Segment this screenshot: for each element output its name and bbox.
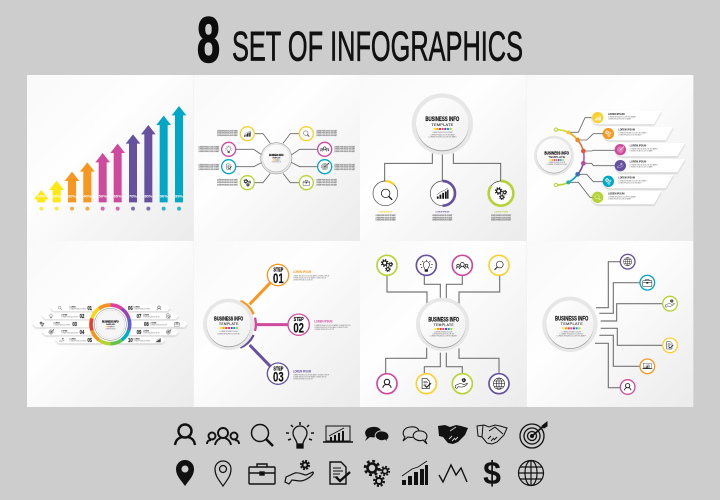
arrow chart: 10%	[37, 193, 46, 198]
step 01: 01	[273, 271, 284, 286]
text blocks: LOREM IPSUM DOLOR SIT AMET	[217, 179, 238, 182]
hub	[203, 299, 254, 350]
cards: LOREM IPSUM	[618, 130, 635, 132]
step 03: LOREM IPSUM DOLOR SIT AMET CONSECTETUR	[293, 374, 329, 377]
step numbers: 05	[87, 338, 92, 344]
cards: LOREM IPSUM	[618, 177, 635, 179]
title: 8	[197, 4, 220, 76]
cards: LOREM IPSUM DOLOR SIT AMET	[608, 195, 637, 198]
text blocks: LOREM IPSUM DOLOR SIT AMET	[316, 179, 338, 182]
arrow chart: 50%	[99, 193, 107, 198]
node captions: LOREM IPSUM	[494, 212, 508, 214]
ring centre: LOREM IPSUM	[105, 329, 116, 331]
text blocks: LOREM IPSUM DOLOR SIT AMET	[316, 181, 338, 184]
pink branch	[255, 318, 290, 331]
text blocks: LOREM IPSUM DOLOR SIT AMET	[334, 148, 356, 151]
step 03: LOREM IPSUM DOLOR SIT	[293, 379, 314, 381]
step captions: LOREM	[70, 306, 76, 308]
cards: LOREM IPSUM	[608, 114, 624, 116]
step numbers	[72, 306, 149, 344]
hub: BUSINESS INFO	[428, 318, 459, 324]
text blocks: LOREM IPSUM DOLOR SIT AMET	[199, 166, 220, 169]
icon row 2: $	[483, 455, 501, 491]
node: chart	[430, 181, 455, 206]
panel: rising arrows	[27, 75, 194, 241]
text blocks: LOREM IPSUM DOLOR SIT AMET	[316, 129, 338, 132]
hub: LOREM IPSUM DOLOR SIT	[432, 334, 454, 336]
text blocks: LOREM IPSUM DOLOR SIT AMET	[334, 168, 356, 171]
hub: TEMPLATE	[548, 155, 565, 159]
step 02	[288, 314, 351, 336]
step captions: LOREM IPSUM DOLOR SIT	[70, 340, 87, 342]
arrow chart: 90%	[160, 193, 168, 198]
cards: LOREM IPSUM DOLOR SIT AMET	[608, 118, 632, 121]
ring centre	[94, 308, 126, 340]
hub: LOREM IPSUM DOLOR SIT	[560, 333, 583, 335]
hub	[542, 297, 598, 352]
icon row 2	[176, 455, 544, 491]
text blocks	[199, 129, 356, 186]
text blocks: LOREM IPSUM DOLOR SIT AMET	[334, 150, 356, 153]
arrow chart	[34, 106, 186, 202]
arrow chart: 99%	[175, 193, 183, 198]
cards: LOREM IPSUM DOLOR SIT AMET	[630, 166, 654, 169]
connectors	[385, 153, 501, 181]
step captions: LOREM IPSUM DOLOR SIT	[134, 340, 151, 342]
node: search	[373, 181, 398, 206]
text blocks: LOREM IPSUM DOLOR SIT AMET	[217, 134, 238, 137]
hub: LOREM IPSUM DOLOR SIT AMET	[557, 334, 586, 337]
text blocks: LOREM IPSUM DOLOR SIT AMET	[199, 168, 220, 171]
step 02: LOREM IPSUM DOLOR SIT	[314, 329, 335, 331]
title	[197, 4, 523, 76]
hub: TEMPLATE	[219, 322, 239, 326]
hub	[534, 136, 574, 176]
step numbers: 02	[80, 314, 84, 320]
hub: LOREM IPSUM DOLOR SIT	[217, 333, 240, 335]
arrow chart: 70%	[129, 193, 137, 198]
step 02: STEP	[294, 317, 304, 323]
step 01: LOREM IPSUM DOLOR SIT AMET CONSECTETUR	[293, 274, 329, 277]
hub: TEMPLATE	[272, 156, 281, 159]
step numbers: 08	[144, 322, 149, 328]
orange branch	[240, 283, 270, 314]
ring centre: BUSINESS INFO	[102, 319, 119, 323]
connectors	[236, 134, 317, 183]
hub: LOREM IPSUM DOLOR SIT AMET	[429, 135, 457, 138]
hub	[412, 93, 473, 155]
hub: LOREM IPSUM DOLOR SIT AMET	[430, 335, 457, 338]
panel: arc with six cards	[527, 75, 693, 241]
icon nodes	[222, 127, 332, 190]
node captions: LOREM IPSUM DOLOR SIT AMET	[376, 216, 396, 219]
marker dots	[39, 207, 181, 211]
text blocks: LOREM IPSUM DOLOR SIT AMET	[199, 163, 220, 166]
ribbon icons	[40, 306, 180, 342]
step numbers: 03	[72, 322, 77, 328]
connectors	[568, 118, 615, 197]
hub: LOREM IPSUM DOLOR	[434, 332, 453, 334]
hub: BUSINESS INFO	[544, 150, 569, 155]
cards: LOREM IPSUM	[630, 146, 646, 148]
text blocks: LOREM IPSUM DOLOR SIT AMET	[334, 163, 356, 166]
hub: TEMPLATE	[431, 122, 454, 127]
cards	[592, 111, 685, 204]
hub: BUSINESS INFO	[555, 315, 588, 322]
step captions: LOREM	[143, 314, 150, 316]
step captions: LOREM IPSUM DOLOR SIT	[150, 324, 168, 326]
text blocks: LOREM IPSUM DOLOR SIT AMET	[316, 183, 338, 186]
purple branch	[240, 335, 270, 366]
bottom icon nodes	[377, 374, 509, 394]
node captions: LOREM IPSUM DOLOR SIT AMET	[432, 214, 453, 217]
rainbow ring	[83, 297, 137, 351]
icon row 1	[175, 422, 547, 448]
arrow chart: 40%	[83, 193, 92, 198]
top icon nodes	[377, 255, 509, 275]
step 02: LOREM IPSUM	[314, 320, 332, 324]
hub: LOREM IPSUM DOLOR SIT AMET	[430, 133, 455, 136]
arrow chart: 20%	[53, 193, 61, 198]
step 01	[267, 264, 329, 286]
node captions: LOREM IPSUM DOLOR SIT AMET	[432, 216, 453, 219]
arrow chart: 30%	[68, 193, 76, 198]
cards: LOREM IPSUM DOLOR SIT AMET	[618, 132, 647, 135]
step numbers: 10	[128, 338, 133, 344]
cards: LOREM IPSUM DOLOR SIT AMET	[618, 134, 642, 137]
panel: eight icon tree	[360, 241, 527, 407]
icon nodes	[620, 254, 677, 394]
cards: LOREM IPSUM DOLOR SIT AMET	[630, 150, 654, 153]
title: SET OF INFOGRAPHICS	[232, 22, 523, 70]
hub: LOREM IPSUM DOLOR SIT AMET	[432, 131, 453, 134]
cards: LOREM IPSUM DOLOR SIT AMET	[608, 197, 632, 200]
panel: three steps	[194, 241, 360, 407]
hub: LOREM IPSUM DOLOR	[562, 331, 582, 333]
left and right ribbons	[33, 305, 188, 343]
step 03: LOREM IPSUM	[293, 369, 311, 373]
step 01: LOREM IPSUM DOLOR SIT AMET CONSECTETUR	[293, 276, 327, 279]
step captions: LOREM	[134, 306, 140, 308]
node captions: LOREM IPSUM DOLOR SIT AMET	[376, 214, 396, 217]
node captions: LOREM IPSUM DOLOR SIT AMET	[491, 216, 512, 219]
panel: six icon bracket tree	[527, 241, 693, 407]
step captions: LOREM	[150, 322, 157, 324]
hub: TEMPLATE	[561, 322, 583, 326]
cards: LOREM IPSUM DOLOR SIT AMET	[618, 181, 642, 184]
panel: eight-node hub	[194, 75, 360, 241]
cards: LOREM IPSUM	[630, 162, 646, 164]
hub	[416, 298, 469, 351]
panel: ten-step ring	[27, 241, 194, 407]
node captions	[376, 212, 512, 222]
hub: LOREM IPSUM DOLOR	[272, 162, 281, 164]
step captions: LOREM	[134, 338, 140, 340]
step 03: LOREM IPSUM DOLOR SIT AMET CONSECTETUR	[293, 376, 327, 379]
node captions: LOREM IPSUM DOLOR SIT AMET	[491, 219, 512, 222]
text blocks: LOREM IPSUM DOLOR SIT AMET	[334, 145, 356, 148]
hub	[261, 143, 292, 174]
step numbers: 01	[87, 306, 92, 312]
step captions: LOREM IPSUM DOLOR SIT	[61, 316, 79, 318]
text blocks: LOREM IPSUM DOLOR SIT AMET	[199, 145, 220, 148]
node captions: LOREM IPSUM	[378, 212, 393, 214]
step captions: LOREM	[61, 314, 68, 316]
hub: BUSINESS INFO	[269, 153, 284, 157]
arrow chart: 60%	[114, 193, 122, 198]
cards: LOREM IPSUM DOLOR SIT AMET	[630, 164, 659, 167]
step captions: LOREM IPSUM DOLOR SIT	[134, 308, 151, 310]
step captions: LOREM IPSUM DOLOR SIT	[143, 332, 160, 334]
step 01: LOREM IPSUM	[293, 270, 311, 274]
cards: LOREM IPSUM	[608, 193, 624, 195]
panel: three-branch tree	[360, 75, 527, 241]
step captions: LOREM IPSUM DOLOR SIT	[143, 316, 160, 318]
arrow chart: 80%	[144, 193, 153, 198]
rainbow arc	[554, 128, 586, 187]
step numbers: 06	[128, 306, 133, 312]
hub: BUSINESS INFO	[214, 317, 244, 323]
hub: LOREM IPSUM DOLOR	[548, 162, 566, 164]
step captions: LOREM	[143, 330, 150, 332]
ring centre: TEMPLATE	[106, 323, 116, 326]
step captions: LOREM IPSUM DOLOR SIT	[61, 332, 79, 334]
step captions: LOREM IPSUM DOLOR SIT	[54, 324, 71, 326]
text blocks: LOREM IPSUM DOLOR SIT AMET	[199, 148, 220, 151]
step numbers: 07	[137, 314, 141, 320]
node captions: LOREM IPSUM DOLOR SIT AMET	[376, 219, 396, 222]
hub: LOREM IPSUM DOLOR	[220, 331, 238, 333]
node captions: LOREM IPSUM DOLOR SIT AMET	[491, 214, 512, 217]
hub: BUSINESS INFO	[425, 116, 459, 123]
text blocks: LOREM IPSUM DOLOR SIT AMET	[217, 129, 238, 132]
step captions	[54, 306, 168, 342]
step 01: LOREM IPSUM DOLOR SIT	[293, 279, 314, 281]
step 03: STEP	[273, 366, 284, 372]
step 02: 02	[293, 321, 304, 336]
hub: LOREM IPSUM DOLOR	[547, 164, 568, 166]
text blocks: LOREM IPSUM DOLOR SIT AMET	[334, 166, 356, 169]
text blocks: LOREM IPSUM DOLOR SIT AMET	[217, 132, 238, 135]
node captions: LOREM IPSUM DOLOR SIT AMET	[432, 219, 453, 222]
step 03	[267, 363, 329, 385]
cards: LOREM IPSUM DOLOR SIT AMET	[608, 116, 637, 119]
step 03: 03	[273, 370, 284, 385]
step captions: LOREM	[70, 338, 76, 340]
step 02: LOREM IPSUM DOLOR SIT AMET CONSECTETUR	[314, 326, 348, 329]
text blocks: LOREM IPSUM DOLOR SIT AMET	[316, 132, 338, 135]
cards: LOREM IPSUM DOLOR SIT AMET	[630, 148, 659, 151]
step 02: LOREM IPSUM DOLOR SIT AMET CONSECTETUR	[314, 324, 351, 327]
text blocks: LOREM IPSUM DOLOR SIT AMET	[217, 183, 238, 186]
step captions: LOREM	[61, 330, 68, 332]
connectors	[386, 276, 500, 373]
cards: LOREM IPSUM DOLOR SIT AMET	[618, 179, 647, 182]
step numbers: 04	[80, 330, 85, 336]
text blocks: LOREM IPSUM DOLOR SIT AMET	[316, 134, 338, 137]
hub: TEMPLATE	[434, 323, 454, 327]
text blocks: LOREM IPSUM DOLOR SIT AMET	[217, 181, 238, 184]
node: gears	[489, 181, 513, 206]
step numbers: 09	[137, 330, 141, 336]
step captions: LOREM	[54, 322, 60, 324]
step 01: STEP	[273, 268, 284, 274]
text blocks: LOREM IPSUM DOLOR SIT AMET	[199, 150, 220, 153]
step captions: LOREM IPSUM DOLOR SIT	[70, 308, 87, 310]
connectors	[595, 262, 663, 388]
node captions: LOREM IPSUM	[435, 212, 450, 214]
